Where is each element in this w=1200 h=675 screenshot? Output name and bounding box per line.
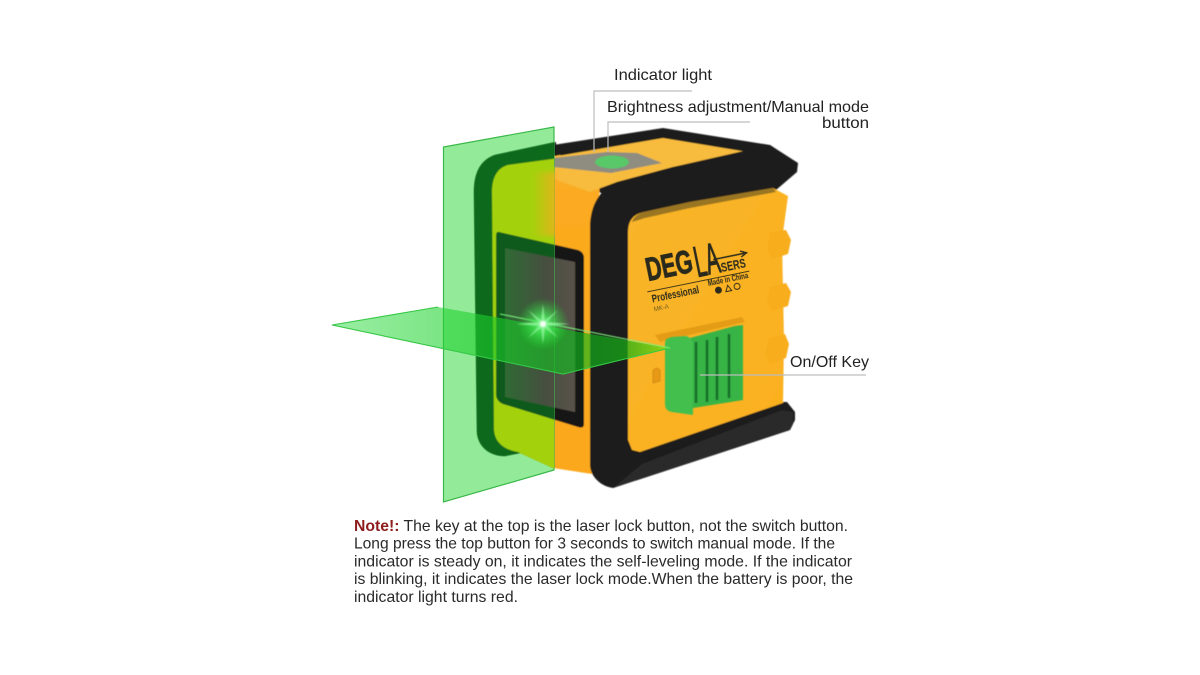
- indicator light: [595, 156, 629, 168]
- tinted top: [540, 147, 556, 160]
- front black frame: [590, 145, 798, 488]
- Made in China label: Made in China: [707, 270, 749, 288]
- horizontal laser plane: [332, 307, 670, 374]
- note line 4: is blinking, it indicates the laser lock mode.When the battery is poor, the: [354, 571, 853, 588]
- lens glass: [505, 248, 575, 412]
- key front block: [665, 336, 693, 415]
- logo arrow: [713, 250, 747, 263]
- leader line: [700, 374, 866, 376]
- plane edges: [332, 307, 670, 374]
- upper shadow on face: [632, 188, 776, 222]
- device shell: [474, 128, 798, 488]
- label: On/Off Key: [790, 354, 869, 371]
- ribbed key section: [690, 325, 743, 408]
- label first line: Brightness adjustment/Manual mode: [607, 99, 869, 116]
- orange side of body: [492, 155, 600, 474]
- certification icons: [715, 283, 741, 294]
- back top rim: [540, 128, 798, 200]
- laser level device: [332, 127, 798, 502]
- note line 1: Note!: The key at the top is the laser lock button, not the switch button.: [354, 518, 848, 535]
- lock icon: [653, 368, 660, 383]
- left black rim: [474, 142, 556, 456]
- Professional label: Professional: [651, 284, 700, 305]
- callout: brightness button: [607, 99, 869, 152]
- note line 5: indicator light turns red.: [354, 589, 518, 606]
- label: Indicator light: [614, 67, 713, 84]
- brand logo: [639, 228, 755, 314]
- side button 3: [765, 334, 789, 364]
- model label: MK-A: [654, 304, 669, 313]
- grey control panel: [553, 152, 662, 173]
- note text block: [354, 518, 853, 606]
- side button 2: [767, 283, 791, 311]
- leader line: [594, 91, 692, 152]
- side fade over plane: [532, 172, 556, 236]
- infographic: laser level diagram: [332, 68, 869, 606]
- tinted lens glass: [504, 248, 554, 408]
- key recess: [655, 317, 745, 342]
- SERS wordmark: SERS: [720, 255, 747, 275]
- LA wordmark: LA: [690, 234, 724, 287]
- callout: indicator light: [594, 67, 713, 152]
- on/off key: [665, 325, 743, 415]
- lower frame bevel: [613, 410, 793, 488]
- top yellow surface: [546, 138, 748, 192]
- label second line: button: [822, 115, 869, 132]
- bright beam line: [500, 314, 670, 348]
- tinted rim: [474, 142, 556, 456]
- note line 2: Long press the top button for 3 seconds to switch manual mode. If the: [354, 536, 835, 552]
- note line 3: indicator is steady on, it indicates the self-leveling mode. If the indicator: [354, 554, 852, 570]
- leader line: [608, 122, 750, 152]
- tinted side: [492, 158, 560, 470]
- tinted lens frame: [496, 231, 554, 420]
- side button 1: [767, 230, 791, 259]
- key ribs: [696, 334, 729, 403]
- yellow front face: [628, 188, 788, 452]
- laser star: [516, 298, 570, 350]
- device seen through plane: [473, 142, 554, 469]
- vertical laser plane: [444, 127, 554, 502]
- logo underline: [647, 271, 749, 292]
- DEG wordmark: DEG: [642, 243, 696, 288]
- lens frame: [496, 232, 584, 428]
